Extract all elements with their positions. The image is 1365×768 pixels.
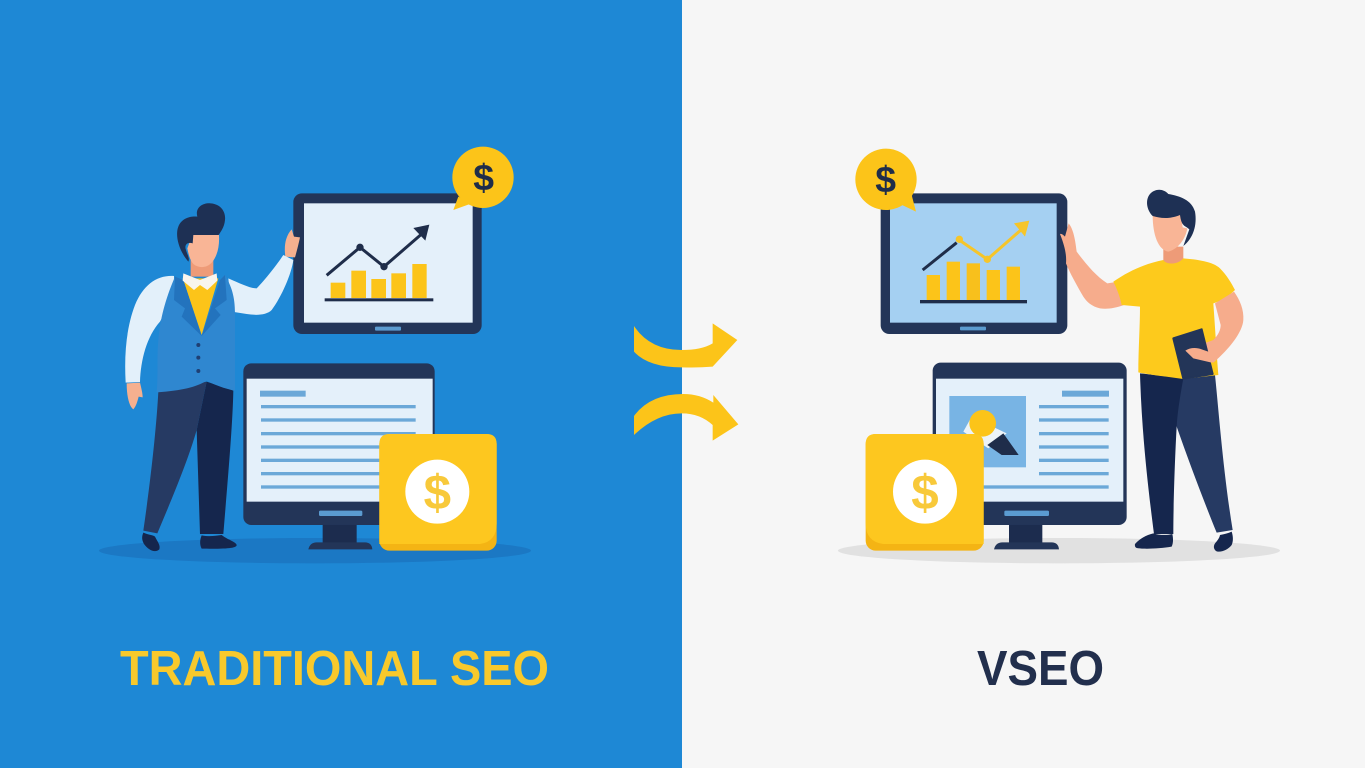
shoes [142,533,160,551]
raised arm [285,229,300,257]
raised arm [1060,223,1124,309]
panel: VSEO background [682,0,1365,768]
icon: yellow dollar card [379,434,497,551]
tablet with growth chart [881,193,1067,334]
heading: VSEO: VSEO [977,642,1104,696]
desktop monitor with image and text lines [933,363,1127,549]
hair [1147,190,1196,246]
icon: dollar speech bubble [855,149,917,212]
neck [191,260,213,277]
vest buttons [196,343,200,347]
tablet with growth chart [293,193,482,334]
trousers [143,382,207,533]
t-shirt [1113,258,1235,379]
collar [183,273,217,290]
neck [1163,247,1183,264]
image thumbnail [949,396,1026,467]
arrow: bottom curved transition arrow [634,394,738,441]
arrow: top curved transition arrow [634,323,737,368]
figure: man in yellow t-shirt [1060,190,1243,552]
illustration: VSEO scene [838,149,1280,563]
trousers [1167,375,1233,533]
lowered arm [127,383,143,409]
icon: dollar speech bubble [452,147,514,210]
icon: yellow dollar card [866,434,984,551]
handheld tablet [1173,329,1213,379]
heading: traditional SEO: TRADITIONAL SEO [120,642,549,696]
shoes [1135,533,1173,549]
ground shadow [838,538,1280,563]
icon: dollar speech bubble: $ [473,156,494,198]
icon: dollar speech bubble: $ [875,158,896,200]
ground shadow [99,538,531,563]
hand on tablet [1185,348,1213,363]
shirt and tie [183,278,218,335]
vest [157,275,235,392]
lower arm [1186,292,1243,363]
desktop monitor with text lines [243,363,435,549]
head [1153,214,1187,252]
head [187,232,219,267]
panel: traditional SEO background [0,0,682,768]
icon: yellow dollar card: $ [424,465,451,520]
icon: yellow dollar card: $ [911,465,939,520]
illustration: traditional SEO scene [99,147,531,563]
figure: man in blue vest [125,203,300,551]
hair [177,203,225,262]
